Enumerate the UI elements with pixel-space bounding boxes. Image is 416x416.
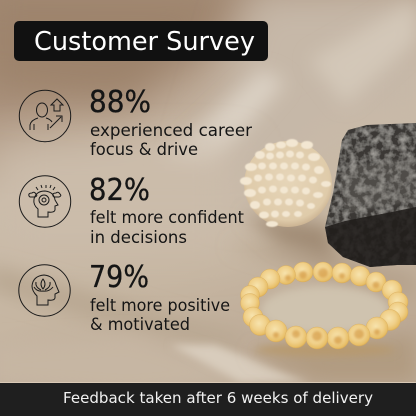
stat: 88% career focus: [19, 85, 252, 159]
icon: head with mind spiral and clouds: [19, 176, 71, 227]
title badge: [14, 21, 268, 61]
icon: head with lotus: [19, 265, 70, 316]
photo: cream flower: [240, 139, 332, 227]
stat: 79% positivity: [19, 260, 230, 334]
photo: citrine bead bracelet: [240, 262, 408, 349]
stat: 79% positivity: 79%: [89, 260, 149, 295]
stat: 88% career focus: focus & drive: [90, 140, 198, 159]
stat: 79% positivity: felt more positive: [90, 296, 230, 315]
stat: 82% confidence: felt more confident: [90, 208, 245, 227]
stat: 82% confidence: in decisions: [90, 228, 187, 247]
stat: 82% confidence: [19, 173, 245, 247]
photo: dark stone: [325, 123, 416, 267]
title badge: Customer Survey: [34, 27, 255, 57]
footer bar: Feedback taken after 6 weeks of delivery: [63, 389, 373, 407]
stat: 88% career focus: experienced career: [90, 121, 252, 140]
stat: 82% confidence: 82%: [89, 173, 150, 208]
icon: person with upward arrows: [19, 90, 71, 142]
stat: 79% positivity: & motivated: [90, 315, 190, 334]
footer bar: [0, 382, 416, 416]
stat: 88% career focus: 88%: [89, 85, 151, 120]
